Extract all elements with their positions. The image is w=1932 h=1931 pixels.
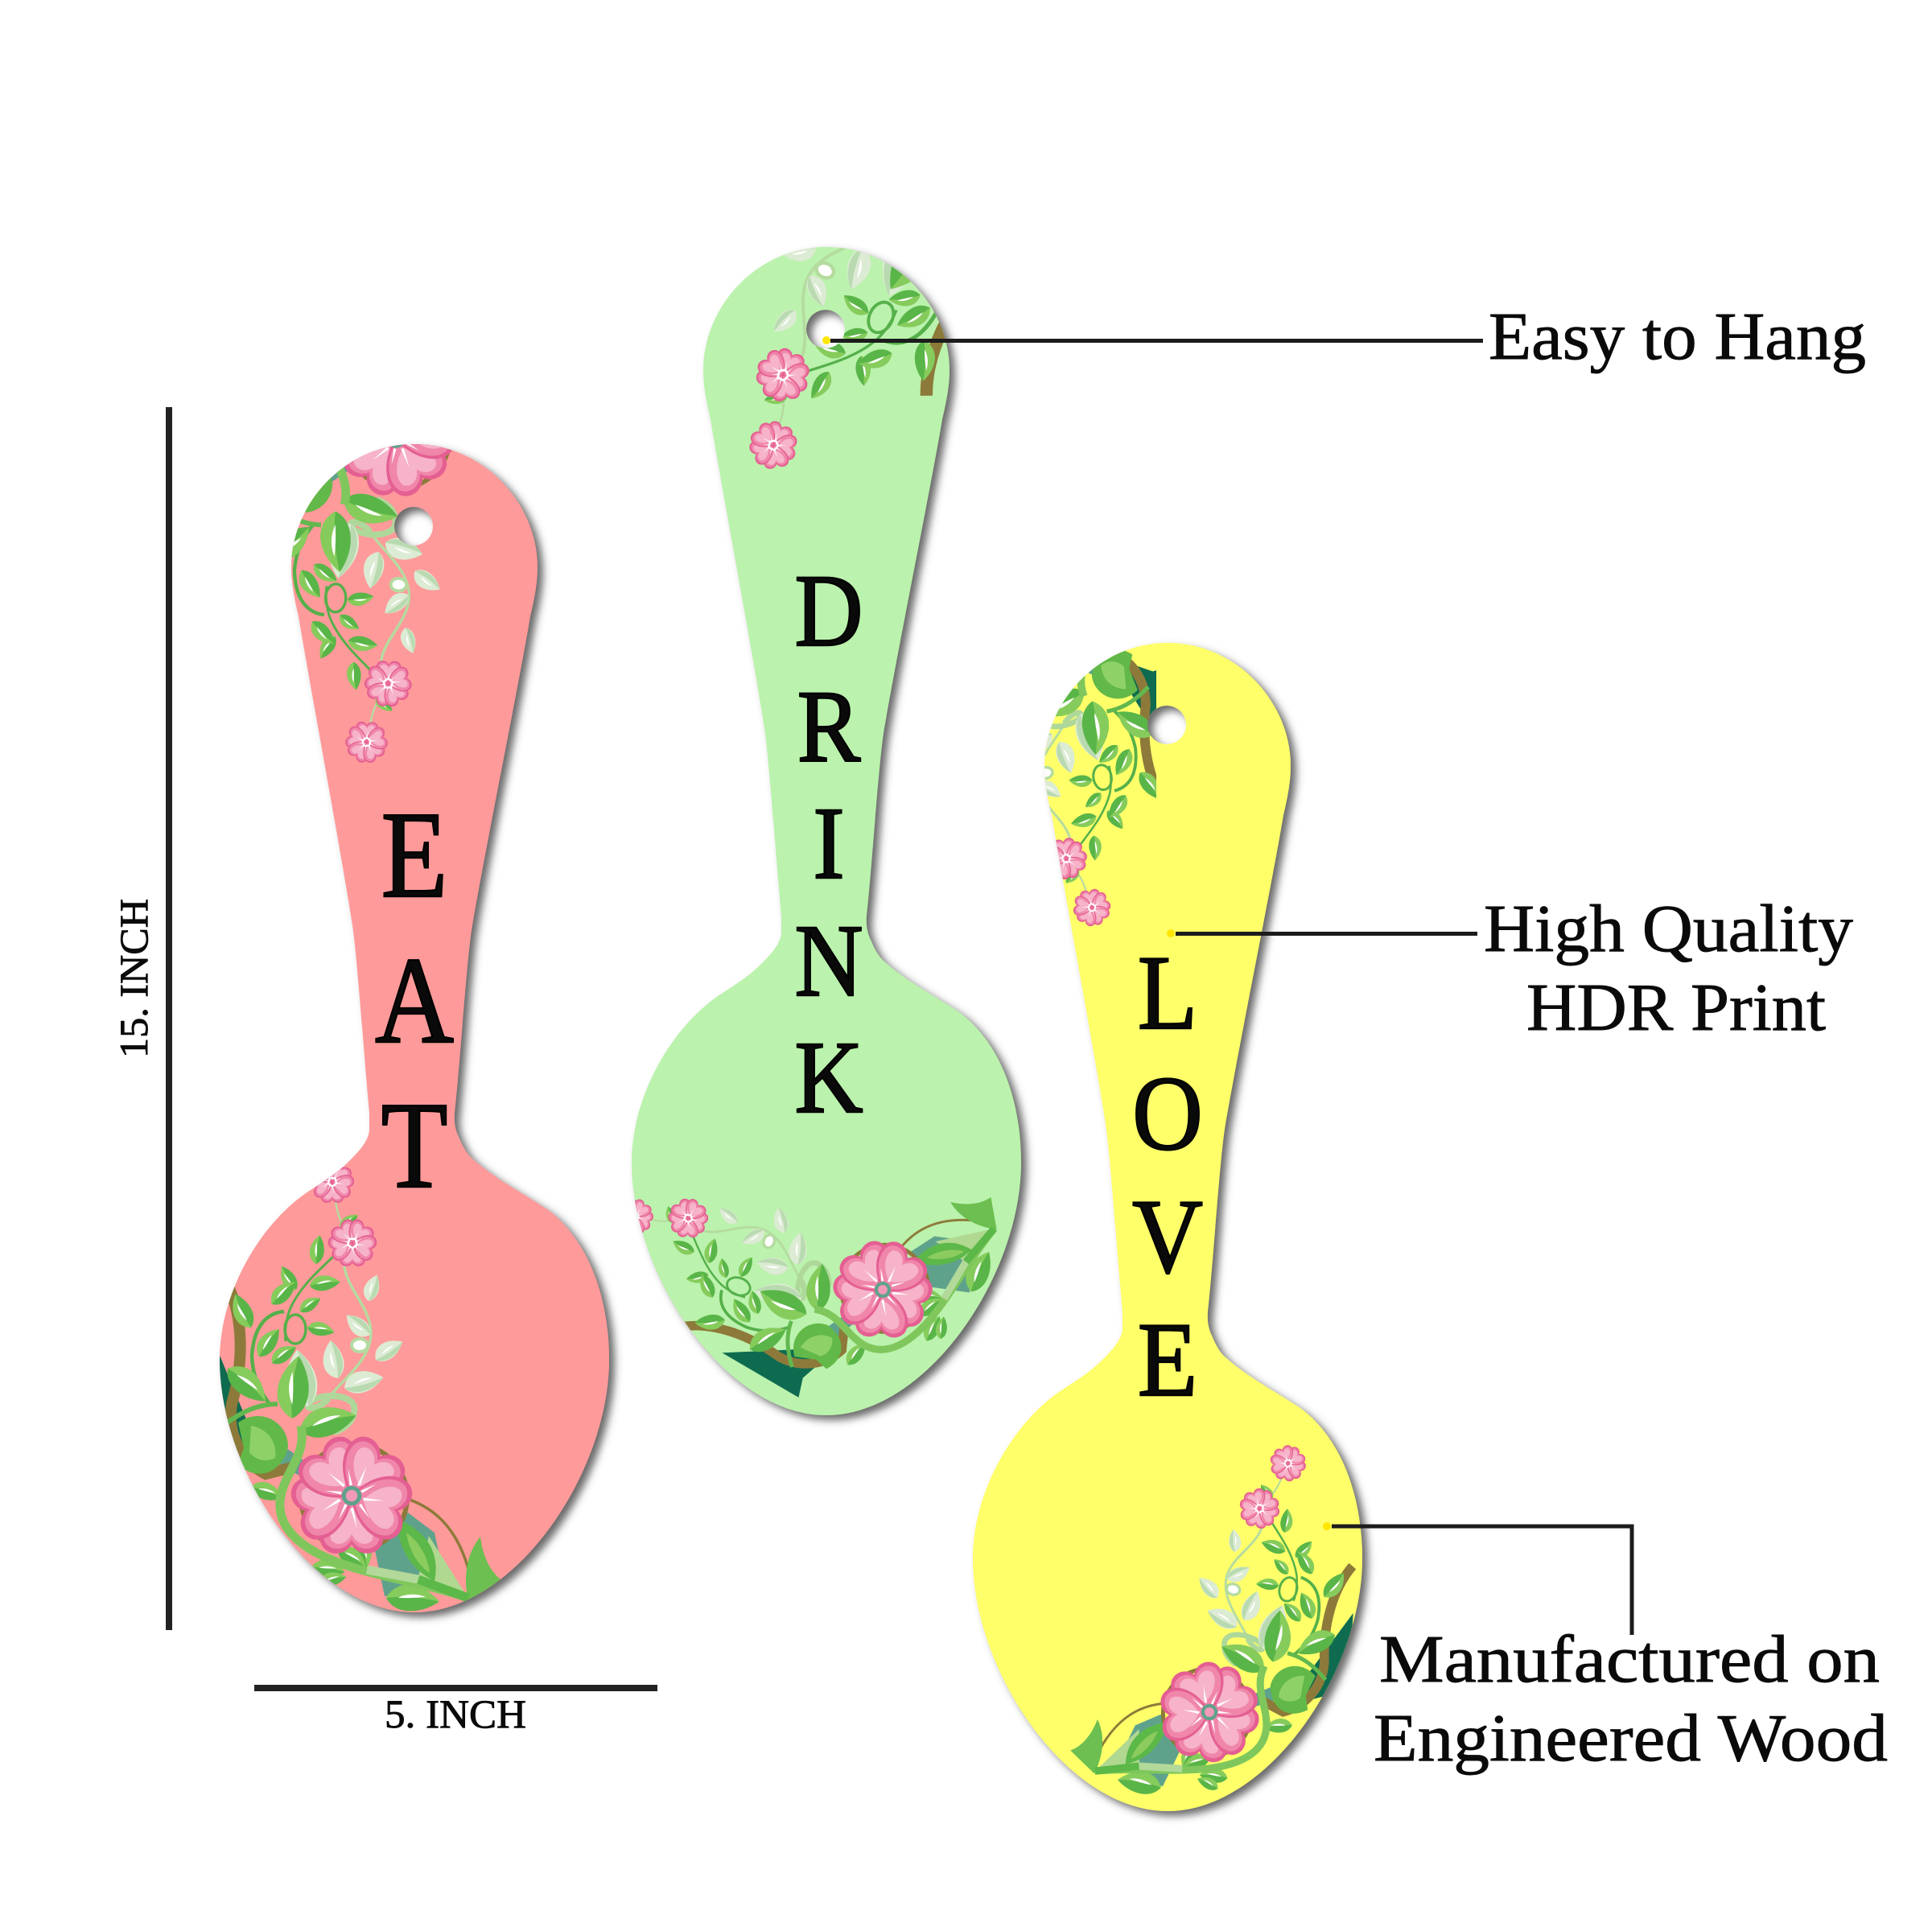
lettering: DRINK: K — [794, 1020, 863, 1134]
callout leader line — [1176, 932, 1477, 936]
lettering: DRINK: I — [813, 786, 845, 900]
dimension: width bar — [254, 1685, 657, 1691]
callout: Easy to Hang — [822, 299, 1866, 374]
lettering: LOVE: E — [1138, 1301, 1197, 1418]
floral artwork: DRINK — [579, 0, 1119, 1445]
callout leader line — [830, 339, 1483, 343]
spoon body: yellow — [973, 643, 1362, 1811]
lettering: EAT: E — [381, 787, 447, 924]
lettering: LOVE: L — [1138, 934, 1197, 1052]
lettering: DRINK: N — [794, 904, 863, 1018]
callout: High Quality HDR Print — [1167, 891, 1853, 1045]
lettering: LOVE — [1132, 934, 1203, 1418]
lettering: EAT: A — [375, 933, 454, 1069]
callout dot — [1323, 1522, 1331, 1530]
dimension label: 5. INCH: 5. INCH — [385, 1691, 526, 1736]
dimension: height bar — [166, 407, 172, 1630]
callout dot — [1167, 929, 1175, 937]
spoon body: coral — [220, 444, 609, 1612]
spoon: LOVE — [972, 642, 1374, 1822]
callout dot — [822, 336, 830, 344]
spoon body: green — [632, 247, 1021, 1415]
callout leader line — [1332, 1526, 1632, 1635]
lettering: EAT: T — [381, 1077, 447, 1214]
spoon: DRINK — [631, 246, 1033, 1426]
callout text: Easy to Hang — [1489, 299, 1866, 374]
floral artwork: LOVE — [1044, 651, 1357, 1794]
lettering: LOVE: V — [1132, 1178, 1203, 1295]
spoon: EAT — [219, 443, 621, 1624]
lettering: DRINK: D — [794, 554, 863, 668]
lettering: DRINK: R — [797, 669, 860, 784]
callout text: HDR Print — [1526, 970, 1826, 1045]
dimension label: 15. INCH: 15. INCH — [111, 899, 156, 1058]
callout text: Manufactured on — [1379, 1622, 1880, 1697]
lettering: LOVE: O — [1132, 1055, 1203, 1172]
floral artwork: EAT — [193, 319, 546, 1613]
lettering: EAT — [375, 787, 454, 1214]
callout: Manufactured on Engineered Wood — [1323, 1522, 1888, 1776]
callout text: High Quality — [1484, 891, 1853, 966]
callout text: Engineered Wood — [1374, 1701, 1888, 1776]
lettering: DRINK — [794, 554, 863, 1134]
